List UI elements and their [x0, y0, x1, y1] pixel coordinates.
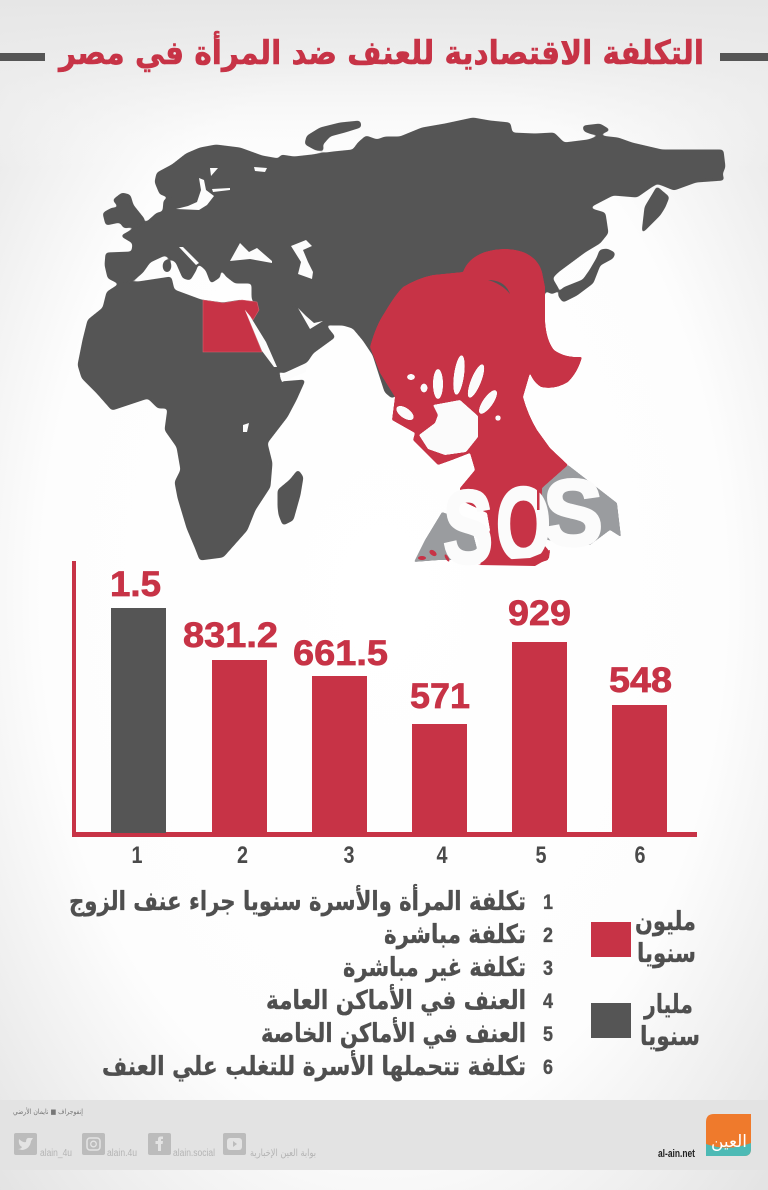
value labels [110, 565, 672, 716]
key numbers: 6 [543, 1056, 553, 1079]
category numbers: 6 [634, 842, 646, 869]
social: facebook: alain.social [173, 1148, 215, 1159]
left shoulder [414, 512, 480, 562]
logo: العين [711, 1132, 747, 1152]
value labels: 548 [609, 661, 672, 700]
SOS letters: S [543, 460, 603, 565]
social: facebook [148, 1133, 215, 1159]
sea: Baltic [176, 178, 214, 210]
handprint [394, 354, 501, 455]
axes [72, 561, 697, 837]
key labels [69, 884, 526, 1082]
footer band [0, 1100, 768, 1170]
map: Africa [78, 277, 305, 560]
lake: Victoria [243, 423, 249, 432]
social: instagram [82, 1133, 137, 1159]
title with side bars: التكلفة الاقتصادية للعنف ضد المرأة في مصر [57, 31, 704, 73]
sea: Gulf of Finland [212, 188, 230, 192]
category numbers: 5 [536, 842, 546, 869]
map: Eurasia [105, 118, 725, 398]
legend: million per year [591, 907, 696, 969]
value labels: 571 [410, 677, 470, 716]
social: youtube: بوابة العين الإخبارية [250, 1148, 316, 1159]
social: twitter [14, 1133, 72, 1159]
legend: billion per year [591, 990, 700, 1052]
key labels: تكلفة تتحملها الأسرة للتغلب علي العنف [102, 1050, 526, 1082]
sea: Black Sea [230, 243, 272, 263]
SOS letters [443, 460, 603, 586]
legend: billion per year: سنويا [640, 1022, 700, 1052]
credit line: إنفوجراف ■ نايمان الأرضي [13, 1107, 83, 1116]
key labels: تكلفة المرأة والأسرة سنويا جراء عنف الزوج [69, 884, 526, 917]
right shoulder [530, 465, 621, 545]
bars [111, 608, 667, 833]
sea: White Sea [210, 167, 267, 176]
head and neck [370, 249, 582, 565]
social: instagram: alain.4u [107, 1148, 137, 1159]
category numbers: 2 [237, 842, 248, 869]
legend [591, 907, 700, 1052]
illustration: woman silhouette with handprint and SOS [370, 249, 621, 586]
key numbers: 4 [543, 990, 553, 1013]
hair detail [488, 280, 510, 294]
map: Novaya Zemlya [305, 121, 361, 150]
sea: Red Sea [245, 310, 277, 367]
map: Japan [558, 249, 615, 302]
seas on map [176, 167, 323, 432]
sea: Adriatic [179, 247, 199, 265]
map: Severnaya Zemlya [583, 124, 610, 134]
value labels: 929 [508, 594, 571, 633]
category numbers: 1 [132, 842, 142, 869]
key numbers: 1 [543, 891, 553, 914]
value labels: 831.2 [183, 616, 278, 655]
logo [706, 1114, 751, 1156]
Egypt highlighted in red [203, 300, 262, 352]
blood drips [418, 488, 550, 566]
SOS letters: O [496, 467, 551, 583]
map: Madagascar [278, 470, 303, 525]
SOS letters: S [443, 470, 493, 586]
key numbers: 5 [543, 1023, 553, 1046]
legend: million per year: مليون [635, 907, 696, 937]
map: Kamchatka [642, 187, 669, 233]
sea: Caspian [291, 240, 313, 279]
world map: Eurasia and Africa [78, 118, 725, 560]
category numbers [132, 842, 646, 869]
map: Britain and Ireland [103, 193, 145, 228]
category numbers: 4 [436, 842, 448, 869]
key labels: العنف في الأماكن العامة [266, 984, 526, 1016]
numbered key list [69, 884, 553, 1082]
site address: al-ain.net [658, 1148, 695, 1160]
key labels: تكلفة مباشرة [384, 920, 526, 950]
value labels: 661.5 [293, 634, 388, 673]
Mediterranean islands [163, 260, 171, 272]
sea: Gulf of Aden [280, 363, 307, 382]
key numbers: 3 [543, 957, 553, 980]
sea: Persian Gulf [298, 308, 323, 329]
key labels: تكلفة غير مباشرة [343, 953, 526, 983]
key numbers [543, 891, 553, 1079]
social: twitter: alain_4u [40, 1148, 72, 1159]
legend: billion per year: مليار [642, 990, 693, 1020]
key numbers: 2 [543, 924, 553, 947]
value labels: 1.5 [110, 565, 161, 604]
legend: million per year: سنويا [637, 939, 696, 969]
category numbers: 3 [344, 842, 354, 869]
social: youtube [223, 1133, 316, 1159]
key labels: العنف في الأماكن الخاصة [261, 1017, 526, 1049]
bar chart [72, 561, 697, 869]
